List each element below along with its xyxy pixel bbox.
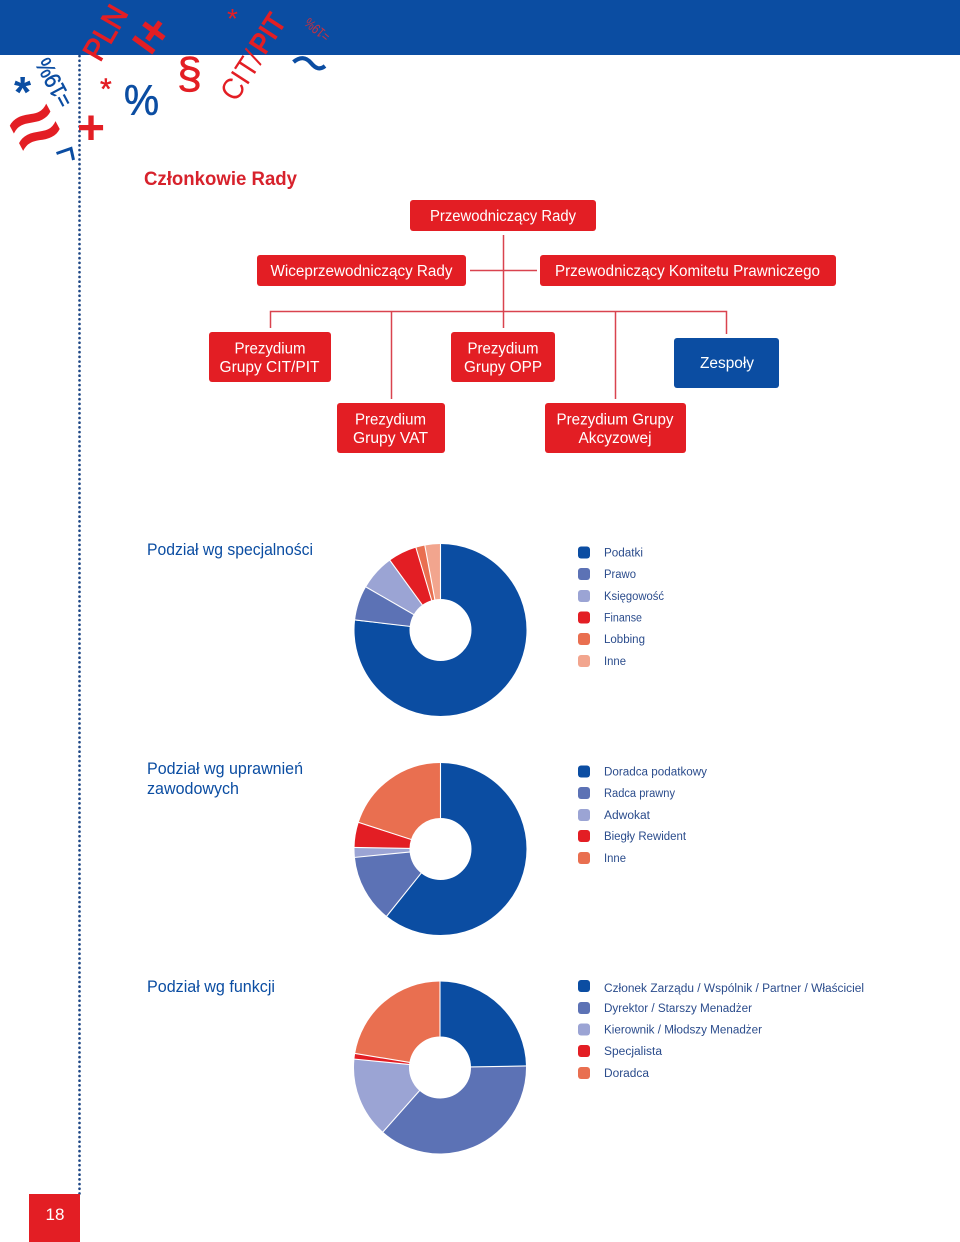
box: OPP group: Prezydium	[468, 340, 538, 358]
legend: specialisation: Inne	[604, 656, 626, 668]
legend: function: Doradca	[604, 1068, 650, 1080]
decorative blue percent text under header: =19%	[30, 54, 77, 112]
decorative symbols: *	[100, 73, 112, 106]
legend: professional qualifications: Radca prawny	[604, 788, 675, 800]
connector lines	[270, 235, 726, 399]
box: chair: Przewodniczący Rady	[430, 208, 576, 225]
box: CIT/PIT group: Prezydium	[234, 340, 306, 358]
decorative symbols: *	[227, 3, 238, 34]
page number: 18	[46, 1205, 64, 1224]
legend: specialisation: Lobbing	[604, 634, 645, 646]
box: excise group: Prezydium Grupy	[556, 412, 674, 428]
box: VAT group: Grupy VAT	[353, 430, 429, 447]
box: CIT/PIT group	[209, 332, 331, 382]
decorative symbols: *	[14, 68, 32, 117]
box: VAT group: Prezydium	[355, 412, 426, 428]
legend: function	[578, 980, 864, 1080]
box: teams: Zespoły	[700, 355, 754, 372]
icon: blue tilde	[294, 58, 325, 68]
legend: professional qualifications	[578, 766, 707, 865]
header band	[0, 0, 960, 55]
box: CIT/PIT group: Grupy CIT/PIT	[220, 359, 320, 376]
legend: function: Dyrektor / Starszy Menadżer	[604, 1003, 752, 1015]
decorative symbols	[0, 0, 333, 179]
legend: function: Kierownik / Młodszy Menadżer	[604, 1024, 762, 1036]
decorative symbols: CIT/	[214, 45, 271, 107]
org chart	[209, 200, 836, 453]
legend: function: Specjalista	[604, 1046, 663, 1058]
decorative symbols: %	[124, 77, 159, 125]
box: teams	[674, 338, 779, 388]
legend: specialisation	[578, 546, 664, 668]
legend: specialisation: Podatki	[604, 548, 643, 560]
box: legal committee chair	[540, 255, 836, 286]
heading: professional qualifications	[147, 760, 303, 798]
decorative symbols: ±	[125, 3, 180, 64]
box: vice-chair	[257, 255, 466, 286]
legend: function: Członek Zarządu / Wspólnik / Partner / Właściciel	[604, 983, 864, 995]
box: OPP group	[451, 332, 555, 382]
box: legal committee chair: Przewodniczący Komitetu Prawniczego	[555, 263, 820, 280]
pie chart: function	[353, 980, 527, 1150]
title: Członkowie Rady	[144, 169, 297, 190]
legend: professional qualifications: Doradca podatkowy	[604, 766, 707, 778]
box: excise group	[545, 403, 686, 453]
legend: professional qualifications: Inne	[604, 853, 626, 865]
pie chart: professional qualifications	[354, 762, 523, 931]
heading: professional qualifications: Podział wg uprawnień	[147, 760, 303, 778]
heading: professional qualifications: zawodowych	[147, 780, 239, 798]
legend: specialisation: Księgowość	[604, 591, 664, 603]
box: chair	[410, 200, 596, 231]
page number	[29, 1194, 80, 1242]
decorative symbols: =19%	[301, 15, 333, 45]
legend: professional qualifications: Biegły Rewident	[604, 831, 687, 843]
box: OPP group: Grupy OPP	[464, 359, 542, 376]
decorative symbols: +	[77, 102, 105, 155]
box: excise group: Akcyzowej	[578, 430, 652, 447]
dotted vertical rule	[78, 56, 81, 1194]
heading: specialisation: Podział wg specjalności	[147, 541, 313, 559]
pie chart: specialisation	[354, 543, 522, 712]
legend: specialisation: Finanse	[604, 612, 642, 624]
legend: specialisation: Prawo	[604, 569, 636, 581]
box: VAT group	[337, 403, 445, 453]
decorative symbols: §	[177, 49, 202, 98]
decorative symbols: PIT	[243, 7, 293, 60]
legend: professional qualifications: Adwokat	[604, 810, 651, 822]
heading: function: Podział wg funkcji	[147, 978, 275, 996]
box: vice-chair: Wiceprzewodniczący Rady	[270, 263, 453, 280]
